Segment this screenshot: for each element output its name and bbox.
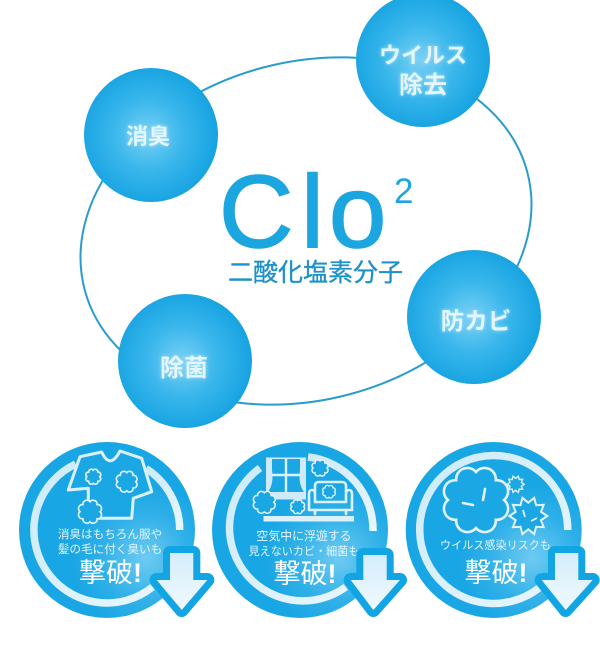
badge text: 消臭はもちろん服や xyxy=(58,527,162,541)
badge text xyxy=(58,527,162,588)
subtitle: 二酸化塩素分子: 二酸化塩素分子 xyxy=(228,259,403,287)
badge text: 髪の毛に付く臭いも xyxy=(58,542,162,556)
circle: 除菌 xyxy=(118,294,252,428)
badge text: 撃破! xyxy=(464,558,528,588)
connecting ellipse xyxy=(41,8,571,454)
badge 1: odor removal xyxy=(19,442,207,618)
arrow xyxy=(542,553,593,610)
badge text: 撃破! xyxy=(79,558,142,588)
circle: ウイルス除去: 除去 xyxy=(399,72,447,99)
arrow xyxy=(351,555,400,610)
badge text: 撃破! xyxy=(274,559,336,589)
circle: 防カビ: 防カビ xyxy=(441,308,511,334)
circle: 除菌: 除菌 xyxy=(160,355,208,382)
formula: Clo2: 2 xyxy=(394,172,413,211)
badge text xyxy=(440,538,551,588)
circle: 消臭: 消臭 xyxy=(126,124,170,149)
progress ring xyxy=(34,464,180,603)
badge disc xyxy=(406,442,582,618)
progress ring xyxy=(420,455,568,603)
badge disc xyxy=(212,442,388,618)
badge 2: airborne mold and bacteria xyxy=(212,442,400,618)
icon: room with window, sofa and spores xyxy=(253,458,354,522)
progress ring xyxy=(230,457,373,601)
circle: ウイルス除去 xyxy=(356,0,490,127)
formula: Clo2: Clo xyxy=(219,154,386,269)
badge text xyxy=(249,529,359,589)
badge text: ウイルス感染リスクも xyxy=(440,538,551,552)
badge text: 見えないカビ・細菌も xyxy=(249,544,359,558)
circle: ウイルス除去: ウイルス xyxy=(379,43,467,68)
icon: viruses xyxy=(444,468,547,534)
badge text: 空気中に浮遊する xyxy=(256,529,352,543)
icon: shirt with odor clouds xyxy=(68,451,152,523)
arrow xyxy=(157,553,207,610)
badge disc xyxy=(19,442,195,618)
circle: 防カビ xyxy=(407,250,541,384)
badge 3: virus infection risk xyxy=(406,442,593,618)
circle: 消臭 xyxy=(84,68,218,202)
